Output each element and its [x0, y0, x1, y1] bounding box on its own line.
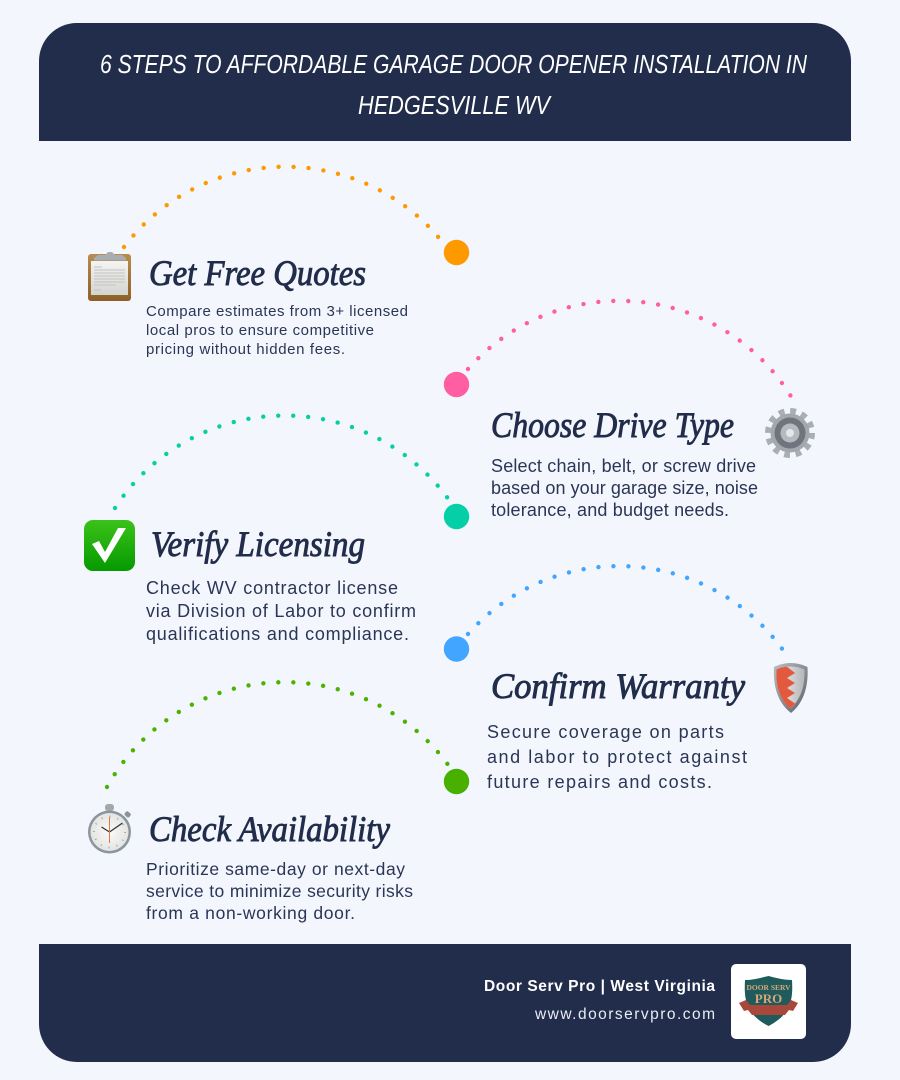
dotted arc: green: [107, 682, 449, 787]
dotted arc: orange: [124, 167, 440, 247]
body text: from a non-working door.: [146, 903, 355, 923]
heading: Choose Drive Type: [491, 405, 734, 445]
panel: step Check Availability: [88, 682, 469, 923]
body text: qualifications and compliance.: [146, 624, 409, 644]
dotted arc: teal: [115, 416, 449, 508]
body text: future repairs and costs.: [487, 772, 712, 792]
node: orange: [444, 240, 469, 265]
panel: step Verify Licensing: [84, 416, 469, 644]
icon: clipboard: [88, 252, 131, 301]
body text: local pros to ensure competitive: [146, 322, 374, 339]
panel: step Choose Drive Type: [444, 301, 811, 520]
heading: Check Availability: [149, 809, 390, 849]
body text: pricing without hidden fees.: [146, 341, 345, 358]
heading: Get Free Quotes: [149, 253, 366, 293]
title: HEDGESVILLE WV: [358, 90, 552, 120]
icon: stopwatch: [88, 804, 132, 854]
body text: via Division of Labor to confirm: [146, 601, 416, 621]
icon: gear: [769, 412, 811, 454]
panel: step Get Free Quotes: [88, 167, 469, 358]
panel: step Confirm Warranty: [444, 566, 808, 792]
body text: Select chain, belt, or screw drive: [491, 456, 756, 476]
logo: PRO: [755, 991, 782, 1006]
body text: [146, 578, 416, 644]
logo: DOOR SERV: [746, 983, 791, 992]
heading: Verify Licensing: [151, 524, 365, 564]
body text: service to minimize security risks: [146, 881, 413, 901]
heading: Confirm Warranty: [491, 666, 745, 706]
title: [100, 49, 807, 120]
logo: [731, 964, 806, 1039]
footer banner: [39, 944, 851, 1062]
dotted arc: blue: [468, 566, 783, 650]
body text: [487, 722, 747, 792]
footer website: www.doorservpro.com: [534, 1006, 715, 1023]
body text: Secure coverage on parts: [487, 722, 724, 742]
body text: [146, 303, 408, 358]
dotted arc: pink: [468, 301, 792, 398]
body text: tolerance, and budget needs.: [491, 500, 729, 520]
body text: based on your garage size, noise: [491, 478, 758, 498]
footer brand name: Door Serv Pro | West Virginia: [484, 978, 715, 995]
header banner: [39, 23, 851, 141]
body text: [146, 859, 413, 923]
node: pink: [444, 372, 469, 397]
node: blue: [444, 636, 469, 662]
body text: Compare estimates from 3+ licensed: [146, 303, 408, 320]
body text: Check WV contractor license: [146, 578, 398, 598]
icon: green check mark: [84, 520, 135, 571]
icon: shield: [774, 663, 808, 713]
body text: [491, 456, 758, 520]
node: teal: [444, 504, 469, 529]
body text: Prioritize same-day or next-day: [146, 859, 405, 879]
node: green: [444, 769, 469, 794]
body text: and labor to protect against: [487, 747, 747, 767]
